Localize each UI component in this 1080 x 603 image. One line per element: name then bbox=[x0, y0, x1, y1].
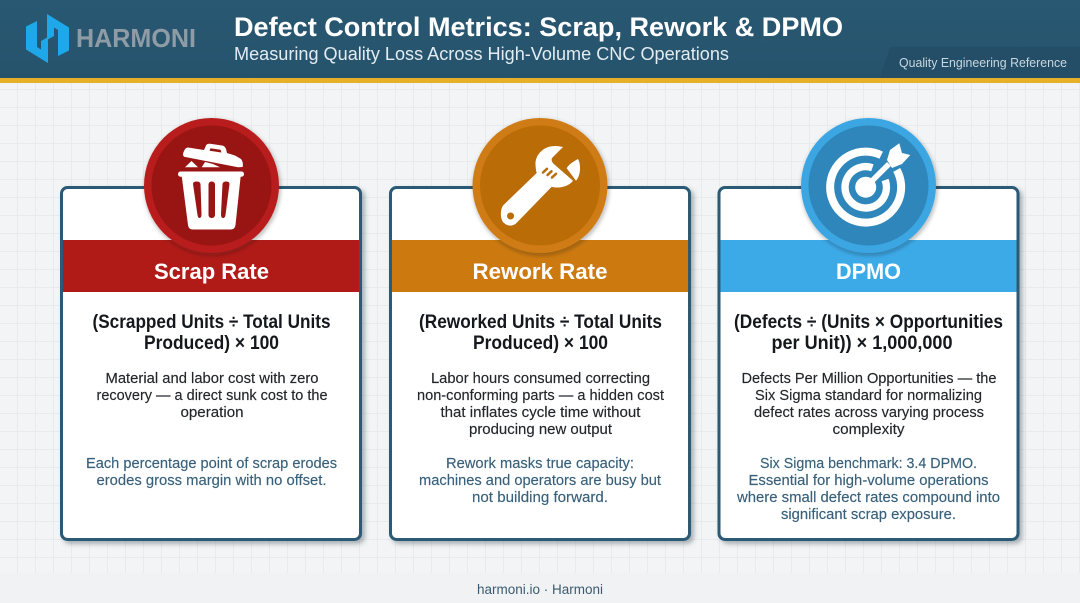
formula bbox=[734, 312, 1003, 354]
heading band: DPMO: DPMO bbox=[836, 259, 901, 284]
note: where small defect rates compound into bbox=[736, 490, 1000, 506]
icon: trash can bbox=[144, 118, 279, 253]
description: that inflates cycle time without bbox=[440, 405, 640, 421]
formula bbox=[92, 312, 330, 354]
logo: Harmoni bbox=[26, 14, 196, 63]
note bbox=[736, 456, 1000, 523]
tag: Quality Engineering Reference: Quality Engineering Reference bbox=[899, 56, 1067, 70]
note: Rework masks true capacity: bbox=[446, 456, 634, 472]
note: not building forward. bbox=[472, 490, 608, 506]
footer: harmoni.io · Harmoni bbox=[477, 582, 603, 597]
note: significant scrap exposure. bbox=[781, 507, 956, 523]
description: Material and labor cost with zero bbox=[106, 371, 318, 387]
description: producing new output bbox=[469, 422, 612, 438]
heading band: Rework Rate bbox=[392, 240, 688, 292]
panel: Scrap Rate bbox=[62, 118, 360, 540]
formula: (Reworked Units ÷ Total Units bbox=[419, 312, 662, 333]
panel: DPMO bbox=[719, 118, 1018, 540]
description: Defects Per Million Opportunities — the bbox=[742, 371, 996, 387]
description bbox=[96, 371, 328, 421]
note: erodes gross margin with no offset. bbox=[96, 473, 326, 489]
formula: (Defects ÷ (Units × Opportunities bbox=[734, 312, 1003, 333]
card frame bbox=[62, 188, 360, 540]
formula: Produced) × 100 bbox=[144, 333, 279, 354]
formula: per Unit)) × 1,000,000 bbox=[772, 333, 952, 354]
footer bbox=[0, 573, 1080, 603]
icon: target with arrow bbox=[801, 118, 936, 253]
panel: Rework Rate bbox=[390, 118, 690, 540]
card frame bbox=[719, 188, 1018, 540]
header bar bbox=[0, 0, 1080, 83]
note: Each percentage point of scrap erodes bbox=[86, 456, 337, 472]
note: Six Sigma benchmark: 3.4 DPMO. bbox=[760, 456, 977, 472]
description: non-conforming parts — a hidden cost bbox=[417, 388, 664, 404]
description: complexity bbox=[832, 422, 905, 438]
description: operation bbox=[180, 405, 244, 421]
note bbox=[86, 456, 337, 489]
logo: Harmoni: HARMONI bbox=[76, 23, 196, 53]
heading band: Scrap Rate bbox=[63, 240, 359, 292]
title: Defect Control Metrics: Scrap, Rework & DPMO bbox=[234, 12, 843, 42]
formula: Produced) × 100 bbox=[473, 333, 608, 354]
description bbox=[417, 371, 664, 438]
description bbox=[742, 371, 996, 438]
heading band: DPMO bbox=[720, 240, 1016, 292]
heading band: Rework Rate: Rework Rate bbox=[472, 259, 608, 284]
note: Essential for high-volume operations bbox=[748, 473, 988, 489]
formula: (Scrapped Units ÷ Total Units bbox=[92, 312, 330, 333]
description: Labor hours consumed correcting bbox=[431, 371, 650, 387]
tag: Quality Engineering Reference bbox=[880, 47, 1080, 78]
note bbox=[419, 456, 661, 506]
description: defect rates across varying process bbox=[754, 405, 984, 421]
note: machines and operators are busy but bbox=[419, 473, 661, 489]
subtitle: Measuring Quality Loss Across High-Volume CNC Operations bbox=[234, 43, 729, 64]
description: Six Sigma standard for normalizing bbox=[755, 388, 982, 404]
heading band: Scrap Rate: Scrap Rate bbox=[154, 259, 269, 284]
formula bbox=[419, 312, 662, 354]
icon: wrench bbox=[472, 118, 608, 253]
card frame bbox=[390, 188, 690, 540]
description: recovery — a direct sunk cost to the bbox=[96, 388, 328, 404]
